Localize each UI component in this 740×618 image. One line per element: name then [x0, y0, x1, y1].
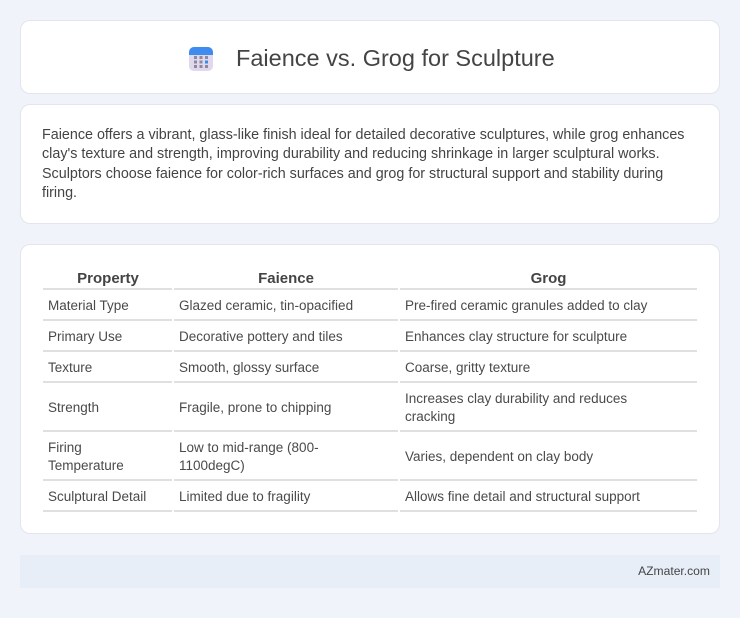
- text block: Faience offers a vibrant, glass-like finish ideal for detailed decorative sculptures, while grog enhances: [42, 127, 684, 143]
- header: Property: Property: [77, 270, 139, 287]
- icon: calendar: [189, 47, 213, 71]
- table: comparison: Increases clay durability and reduces: [405, 391, 627, 406]
- table: comparison: Decorative pottery and tiles: [179, 329, 343, 344]
- panel: intro text: [20, 104, 720, 224]
- panel: title: [20, 20, 720, 94]
- row: Primary Use: Primary Use: [48, 329, 122, 344]
- table: comparison: Enhances clay structure for sculpture: [405, 329, 627, 344]
- row: Texture: Texture: [48, 360, 92, 375]
- table: comparison: 1100degC): [179, 458, 245, 473]
- text block: Sculptors choose faience for color-rich surfaces and grog for structural support and stability during: [42, 166, 663, 182]
- table: comparison: Limited due to fragility: [179, 489, 310, 504]
- row: Sculptural Detail: Sculptural Detail: [48, 489, 146, 504]
- table: comparison: Low to mid-range (800-: [179, 440, 319, 455]
- panel: table: [20, 244, 720, 534]
- heading: Faience vs. Grog for Sculpture: [236, 45, 555, 71]
- row: Firing Temperature: Temperature: [48, 458, 124, 473]
- table: comparison: Pre-fired ceramic granules added to clay: [405, 298, 647, 313]
- header: Grog: Grog: [531, 270, 566, 287]
- row: Strength: Strength: [48, 400, 99, 415]
- text block: [42, 127, 684, 201]
- table: comparison: Fragile, prone to chipping: [179, 400, 331, 415]
- header: Faience: Faience: [258, 270, 314, 287]
- text block: firing.: [42, 185, 77, 201]
- footer bar: [20, 555, 720, 588]
- table: comparison: Smooth, glossy surface: [179, 360, 319, 375]
- footer credit: AZmater.com: [638, 564, 710, 578]
- row: Material Type: Material Type: [48, 298, 129, 313]
- table: comparison: cracking: [405, 409, 455, 424]
- row: Firing Temperature: Firing: [48, 440, 82, 455]
- table: comparison: Coarse, gritty texture: [405, 360, 530, 375]
- table: comparison: Allows fine detail and structural support: [405, 489, 640, 504]
- row: Firing Temperature: [48, 440, 124, 473]
- text block: clay's texture and strength, improving durability and reducing shrinkage in larger sculptural works.: [42, 146, 660, 162]
- table: comparison: Varies, dependent on clay body: [405, 449, 593, 464]
- table: comparison: Glazed ceramic, tin-opacified: [179, 298, 353, 313]
